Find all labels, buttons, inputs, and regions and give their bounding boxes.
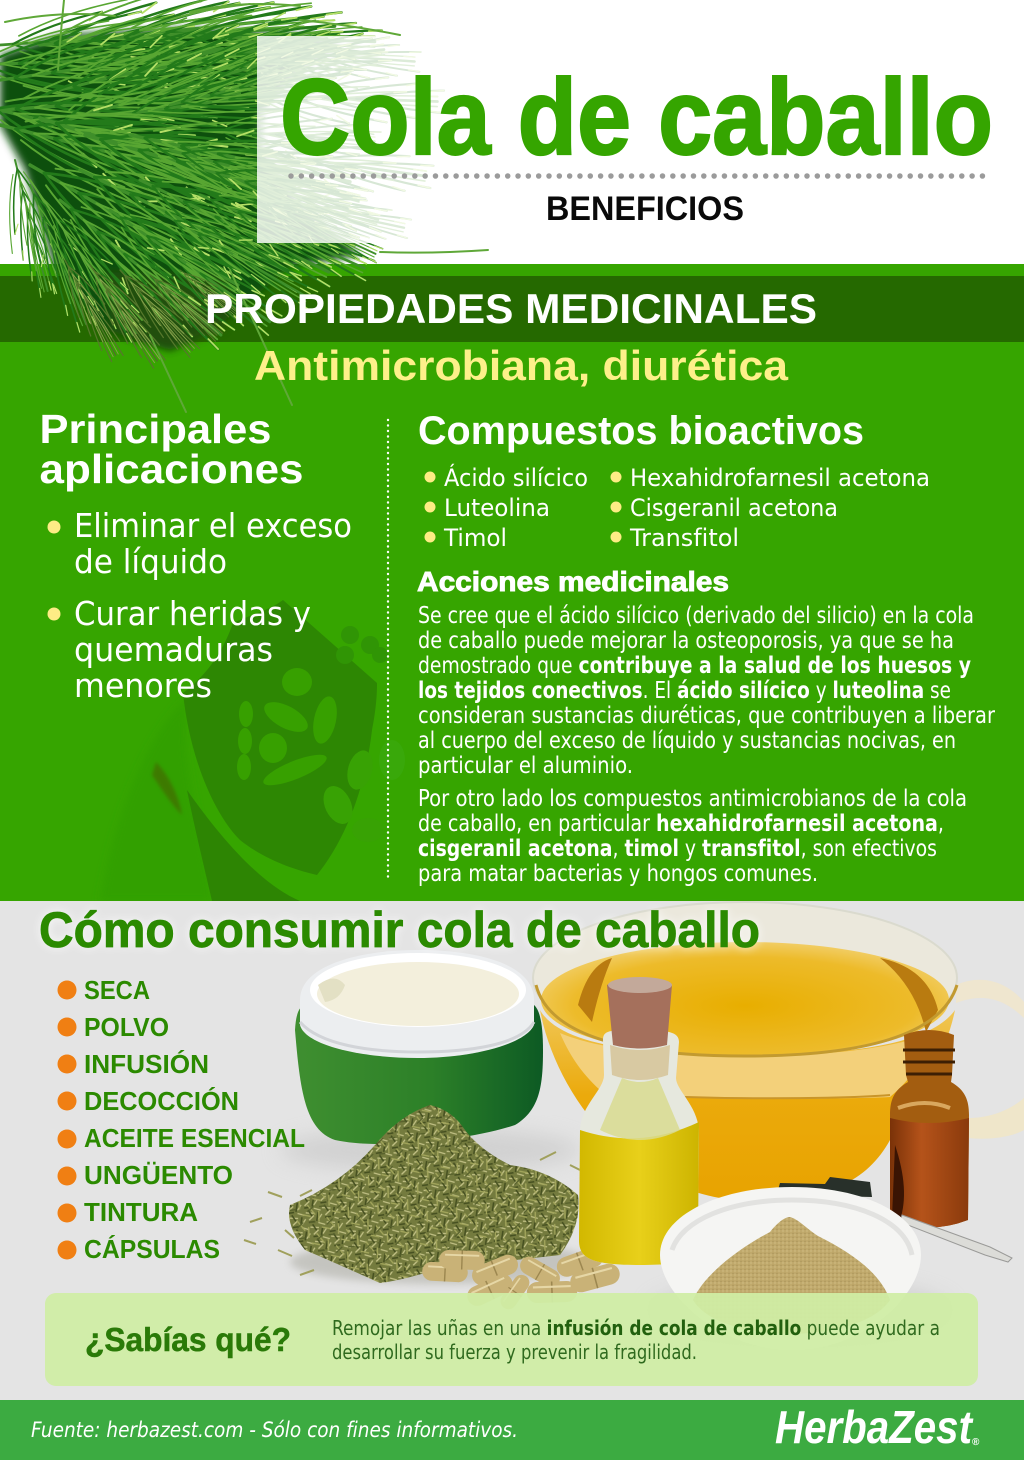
text block: actions paragraph two: para matar bacterias y hongos comunes. [418, 859, 818, 887]
bullet item: wounds and burns: quemaduras [74, 630, 273, 669]
subheading: properties list: Antimicrobiana, diurética [254, 342, 789, 389]
heading: bioactive compounds: Compuestos bioactivos [418, 409, 864, 453]
compounds list: Luteolina [444, 494, 550, 522]
list: consumption forms: SECA [84, 975, 150, 1005]
illustration: dried herb pile [244, 1105, 600, 1284]
registered mark: ® [972, 1437, 980, 1448]
compounds list: Ácido silícico [444, 463, 588, 492]
list: consumption forms: INFUSIÓN [84, 1049, 209, 1079]
illustration: bowl of powder [650, 1187, 950, 1350]
compounds list [424, 463, 938, 552]
column: bioactive compounds [417, 409, 995, 887]
list: consumption forms [58, 975, 305, 1264]
bullet item: excess fluid: Eliminar el exceso [74, 506, 352, 545]
illustration: oil bottle with cork [579, 977, 699, 1265]
illustration: black cap and glass dropper [778, 1177, 1012, 1262]
source note: Fuente: herbazest.com - Sólo con fines informativos. [31, 1418, 518, 1442]
illustration: glass cup of tea [533, 902, 1024, 1200]
callout heading: ¿Sabías qué? [85, 1321, 291, 1358]
compounds list: Timol [443, 524, 507, 552]
list: consumption forms: DECOCCIÓN [84, 1086, 239, 1116]
callout text: Remojar las uñas en una infusión de cola de caballo puede ayudar a [332, 1316, 940, 1340]
text block: actions paragraph two: de caballo, en particular hexahidrofarnesil acetona, [418, 809, 944, 837]
list: consumption forms: ACEITE ESENCIAL [84, 1123, 305, 1153]
list: consumption forms: CÁPSULAS [84, 1234, 220, 1264]
text block: actions paragraph one: particular el aluminio. [418, 751, 633, 779]
bullet item: excess fluid: de líquido [74, 542, 227, 581]
bullet item: wounds and burns: menores [74, 666, 212, 705]
heading: main applications: Principales [40, 406, 272, 452]
illustration: capsules [422, 1244, 622, 1312]
illustration: horsetail plant fronds [0, 0, 488, 412]
subtitle: BENEFICIOS [546, 190, 744, 228]
heading: main applications: aplicaciones [40, 446, 304, 492]
logo: HerbaZest: HerbaZest [775, 1401, 973, 1453]
heading: how to consume: Cómo consumir cola de caballo [39, 902, 760, 958]
dotted title rule [291, 173, 987, 179]
illustration: amber dropper bottle [890, 1030, 969, 1228]
bullet item: wounds and burns [48, 594, 311, 705]
illustration: wound and shield watermark [100, 600, 405, 901]
band: properties title strip [0, 276, 1024, 342]
panel: translucent title backdrop [257, 36, 1024, 243]
compounds list: Hexahidrofarnesil acetona [630, 464, 930, 492]
list: consumption forms: TINTURA [84, 1197, 198, 1227]
header background [0, 0, 1024, 264]
callout text [332, 1316, 940, 1364]
heading: medicinal actions: Acciones medicinales [417, 566, 729, 597]
footer [0, 1400, 1024, 1460]
callout text: desarrollar su fuerza y prevenir la fragilidad. [332, 1340, 697, 1364]
text block: actions paragraph two [418, 784, 967, 887]
bullet item: excess fluid [48, 506, 352, 581]
text block: actions paragraph one: los tejidos conectivos. El ácido silícico y luteolina se [418, 676, 951, 704]
list: consumption forms: UNGÜENTO [84, 1160, 233, 1190]
panel: medicinal properties background [0, 264, 1024, 901]
bullet item: wounds and burns: Curar heridas y [74, 594, 311, 633]
list: consumption forms: POLVO [84, 1012, 169, 1042]
callout: did you know [45, 1293, 978, 1386]
compounds list: Cisgeranil acetona [630, 494, 838, 522]
panel: how to consume background [0, 901, 1024, 1400]
column: main applications [40, 406, 352, 705]
compounds list: Transfitol [629, 524, 739, 552]
text block: actions paragraph two: cisgeranil acetona, timol y transfitol, son efectivos [418, 834, 937, 862]
dotted column divider [387, 420, 389, 880]
text block: actions paragraph one [418, 601, 995, 779]
heading: medicinal properties: PROPIEDADES MEDICINALES [205, 285, 817, 332]
illustration: cream jar [280, 950, 580, 1172]
